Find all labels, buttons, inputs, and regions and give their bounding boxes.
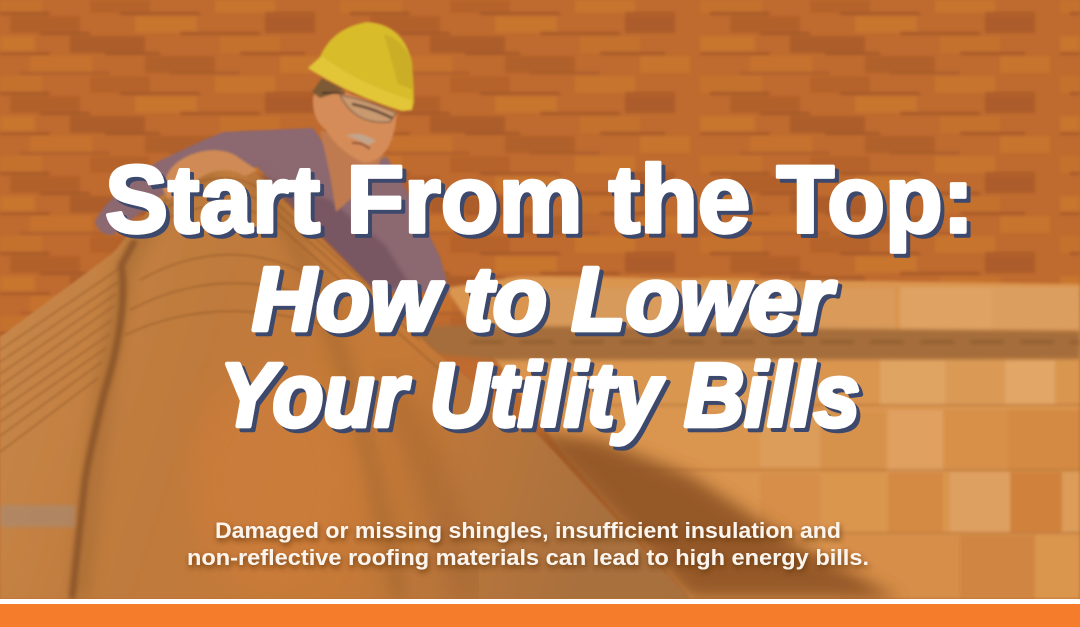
hard hat — [308, 22, 414, 111]
title line 1: Start From the Top: — [105, 146, 974, 253]
glasses — [322, 92, 345, 94]
orange footer band — [0, 604, 1080, 627]
subtitle line 1: Damaged or missing shingles, insufficient insulation and — [215, 518, 841, 543]
gutter strip — [0, 505, 75, 527]
man's shirt — [95, 128, 450, 292]
hip ridge band — [390, 325, 1080, 360]
title line 2: How to Lower — [252, 250, 837, 350]
upper roof shingles — [0, 0, 1080, 345]
hand on ridge — [163, 150, 257, 200]
subtitle text — [187, 518, 869, 570]
moustache — [346, 134, 376, 145]
title — [105, 146, 974, 446]
ridge shingle stripes — [0, 178, 440, 452]
big roof ridge in foreground — [0, 163, 690, 599]
lower right roof shingles — [440, 276, 1080, 599]
title line 3: Your Utility Bills — [220, 346, 860, 446]
man's neck and face — [312, 78, 397, 212]
white divider — [0, 599, 1080, 604]
diagonal shadow on lower roof — [530, 430, 900, 599]
subtitle line 2: non-reflective roofing materials can lead to high energy bills. — [187, 545, 869, 570]
